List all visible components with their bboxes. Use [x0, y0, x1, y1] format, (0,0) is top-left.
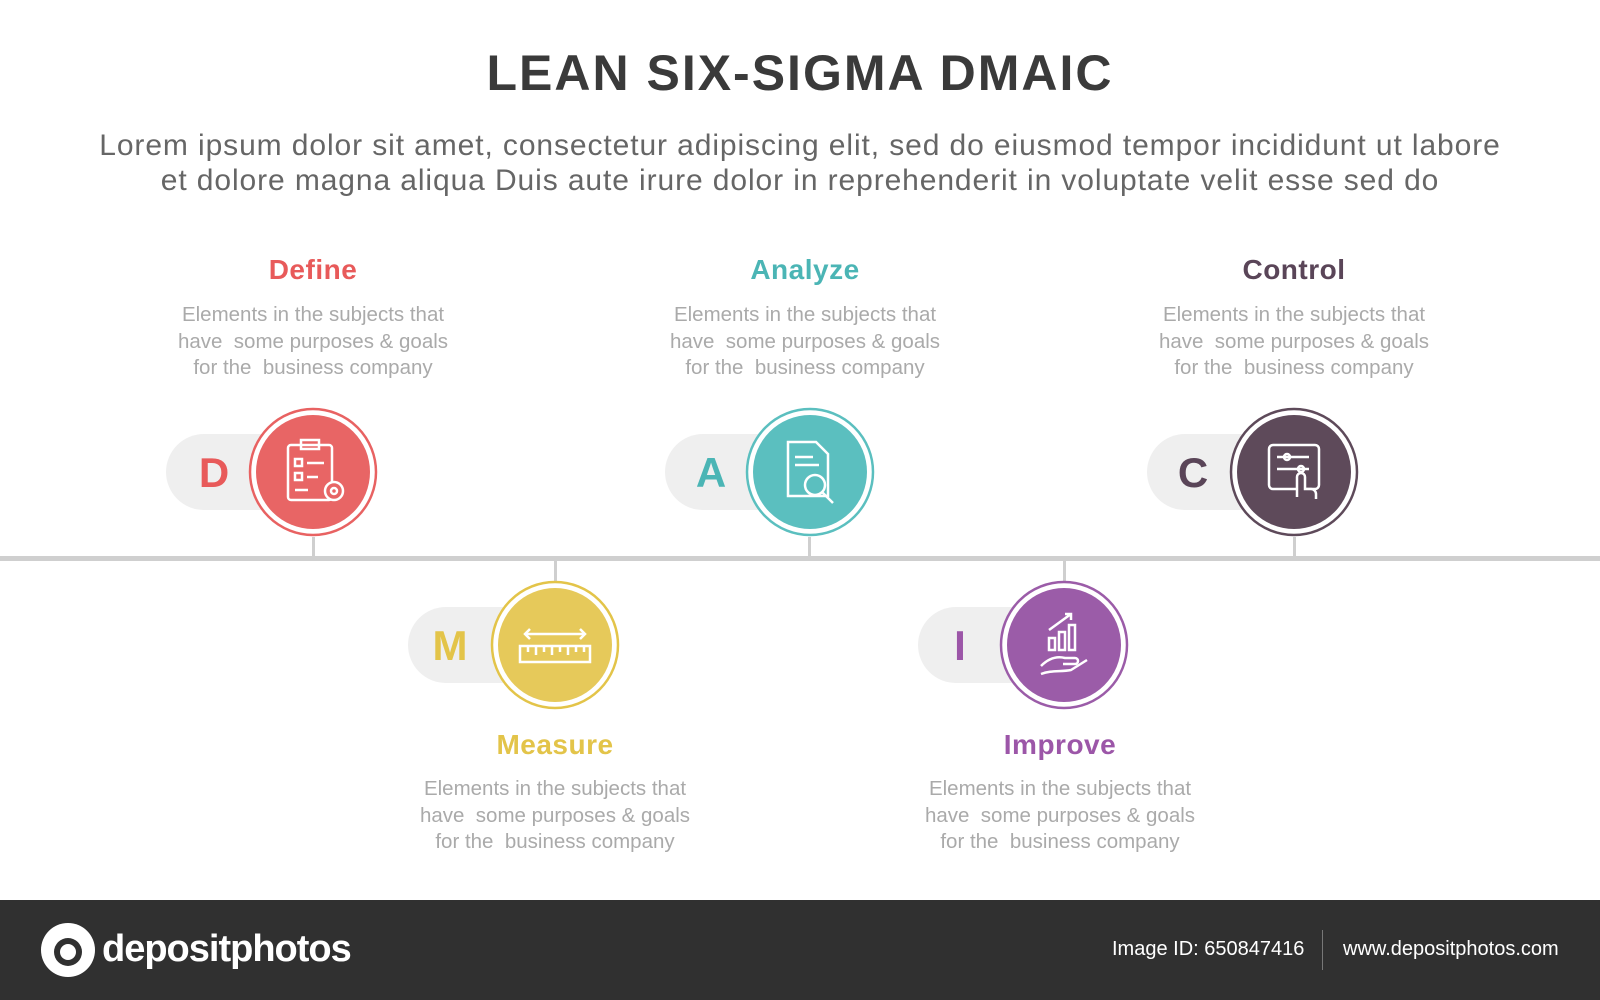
text: Control description: for the business company [1174, 356, 1414, 379]
text: Measure description [420, 777, 690, 853]
text: Control description: Elements in the subjects that [1163, 303, 1425, 326]
heading: Control: Control [1242, 254, 1346, 285]
text: Analyze description: Elements in the subjects that [674, 303, 936, 326]
pill with letter D [166, 434, 326, 510]
subtitle [99, 129, 1501, 197]
text: Define description [178, 303, 448, 379]
step: Control [1147, 254, 1429, 556]
text: Control description [1159, 303, 1429, 379]
pill with letter M [408, 607, 568, 683]
text: Improve description: for the business company [940, 830, 1180, 853]
text: Define description: have some purposes & goals [178, 330, 448, 352]
text: Measure description: Elements in the subjects that [424, 777, 686, 800]
pill with letter A [665, 434, 825, 510]
footer logo [41, 923, 351, 977]
text: Analyze description: for the business company [685, 356, 925, 379]
step: Define [166, 254, 448, 556]
text: Define description: Elements in the subjects that [182, 303, 444, 326]
footer url: www.depositphotos.com [1343, 938, 1559, 960]
footer bar [0, 900, 1600, 1000]
step: Analyze [665, 254, 940, 556]
text: Control description: have some purposes & goals [1159, 330, 1429, 352]
pill with letter I: I [954, 622, 966, 669]
icon circle: Analyze [746, 408, 874, 536]
pill with letter M: M [432, 622, 468, 669]
text: Measure description: have some purposes & goals [420, 804, 690, 826]
heading: Improve: Improve [1004, 729, 1116, 760]
step: Measure [408, 561, 690, 853]
connector [1063, 556, 1066, 581]
icon circle: Define [248, 408, 378, 536]
heading: Measure: Measure [496, 729, 614, 760]
text: Improve description [925, 777, 1195, 853]
icon circle: Control [1230, 408, 1358, 536]
pill with letter D: D [199, 449, 229, 496]
connector [808, 537, 811, 557]
connector [1293, 537, 1296, 557]
heading: Analyze: Analyze [750, 254, 860, 285]
connector [554, 556, 557, 581]
subtitle: Lorem ipsum dolor sit amet, consectetur adipiscing elit, sed do eiusmod tempor incididunt ut labore [99, 129, 1501, 162]
pill with letter A: A [696, 449, 726, 496]
text: Define description: for the business company [193, 356, 433, 379]
text: Improve description: Elements in the subjects that [929, 777, 1191, 800]
text: Analyze description [670, 303, 940, 379]
footer logo: depositphotos [102, 928, 351, 970]
text: Measure description: for the business company [435, 830, 675, 853]
timeline line [0, 556, 1600, 561]
pill with letter C: C [1178, 449, 1208, 496]
pill with letter C [1147, 434, 1307, 510]
text: Improve description: have some purposes & goals [925, 804, 1195, 826]
footer image id: Image ID: 650847416 [1112, 938, 1304, 960]
subtitle: et dolore magna aliqua Duis aute irure dolor in reprehenderit in voluptate velit esse sed do [161, 164, 1439, 197]
pill with letter I [918, 607, 1078, 683]
text: Analyze description: have some purposes & goals [670, 330, 940, 352]
title: LEAN SIX-SIGMA DMAIC [486, 45, 1114, 101]
icon circle: Improve [1000, 580, 1128, 710]
step: Improve [918, 561, 1195, 853]
icon circle: Measure [490, 580, 620, 710]
heading: Define: Define [269, 254, 357, 285]
connector [312, 537, 315, 557]
